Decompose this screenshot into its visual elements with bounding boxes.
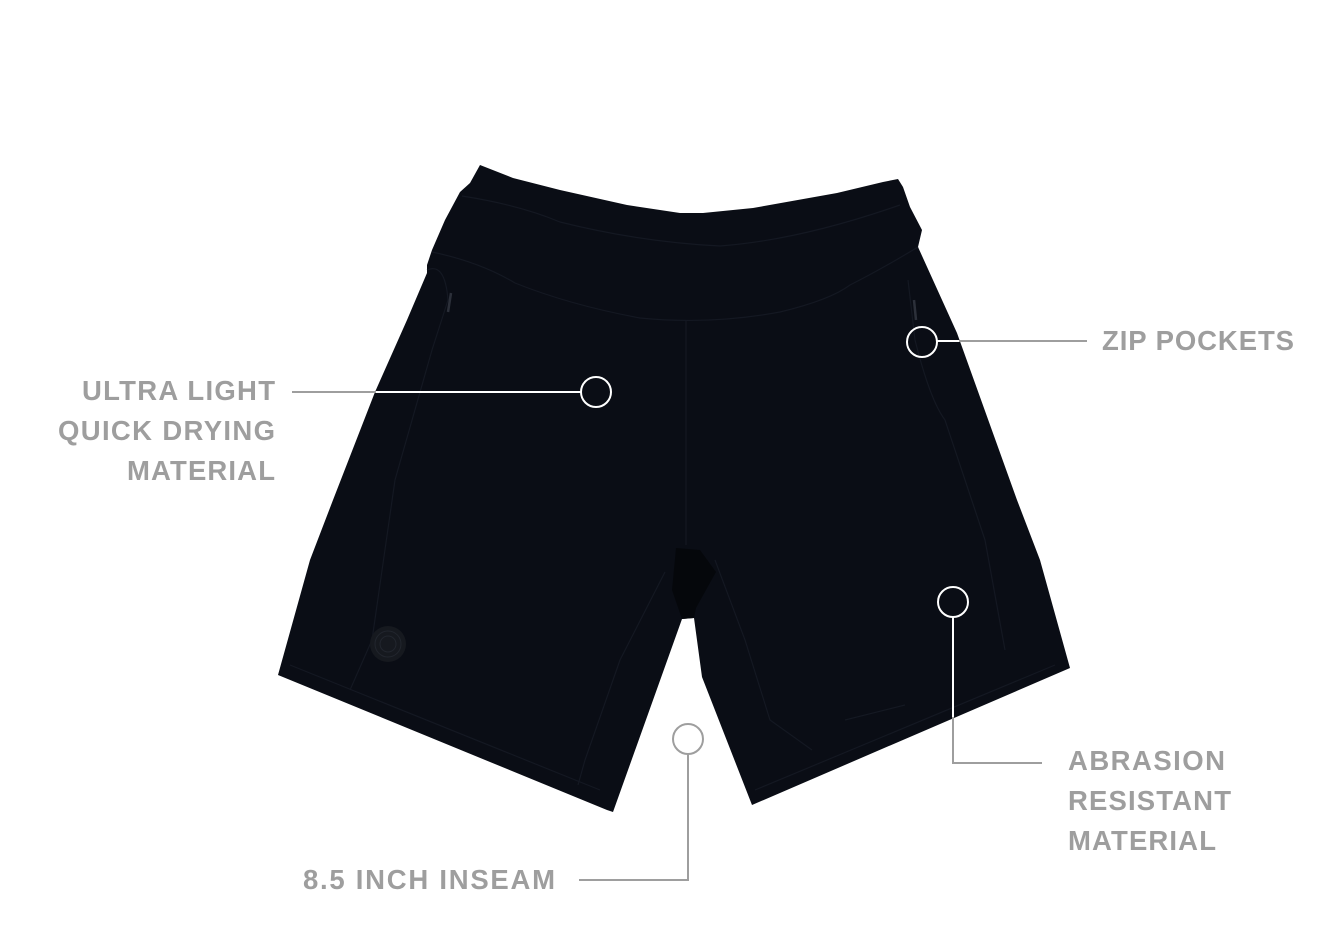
callout: zip pockets <box>907 325 1294 357</box>
crotch gusset shadow <box>672 548 716 619</box>
callout: abrasion resistant material: ABRASION <box>1068 745 1225 776</box>
callout: abrasion resistant material: RESISTANT <box>1068 785 1231 816</box>
callout: ultra light quick drying material: ULTRA LIGHT <box>82 375 275 406</box>
callout: ultra light quick drying material: MATERIAL <box>127 455 275 486</box>
callout: 8.5 inch inseam <box>303 724 703 895</box>
callout: ultra light quick drying material <box>58 375 611 486</box>
callout: 8.5 inch inseam: 8.5 INCH INSEAM <box>303 864 555 895</box>
right zipper pull <box>914 300 916 320</box>
callout: abrasion resistant material <box>938 587 1231 856</box>
callout: ultra light quick drying material: QUICK DRYING <box>58 415 275 446</box>
left zipper pull <box>448 293 451 312</box>
callout: abrasion resistant material: MATERIAL <box>1068 825 1216 856</box>
icon: round logo patch <box>370 626 406 662</box>
callout: zip pockets: ZIP POCKETS <box>1102 325 1294 356</box>
waistband and seam details <box>290 196 1055 790</box>
product: black shorts <box>278 165 1070 812</box>
